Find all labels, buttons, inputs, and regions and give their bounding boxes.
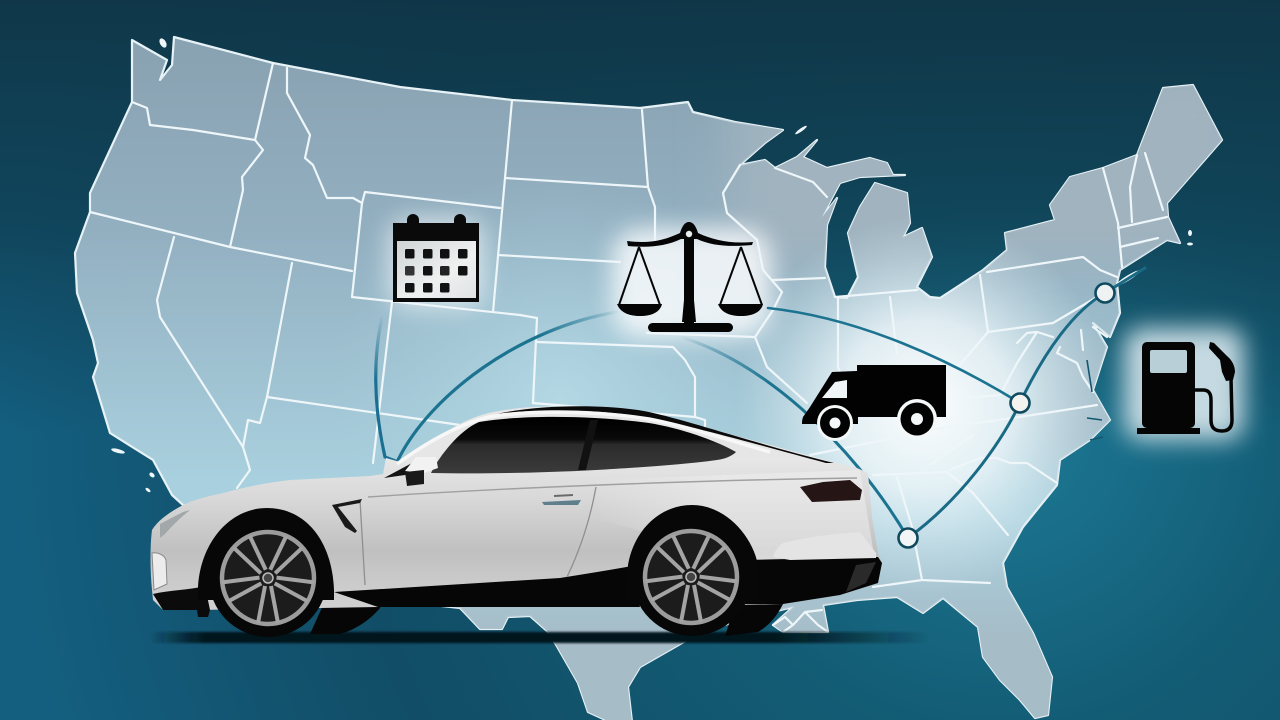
islands bbox=[111, 37, 1193, 493]
headlight bbox=[160, 510, 190, 538]
rear bumper crease bbox=[773, 532, 876, 560]
front bumper grille bbox=[152, 553, 167, 590]
light rear quarter bbox=[596, 470, 874, 560]
route stop: south bbox=[898, 528, 918, 548]
side vent bbox=[332, 499, 362, 533]
icon: fuel pump bbox=[1124, 328, 1244, 440]
route stop: northeast bbox=[1096, 284, 1114, 302]
route stop: east bbox=[1010, 394, 1030, 412]
route arcs bbox=[376, 268, 1145, 538]
icon: delivery truck bbox=[802, 365, 946, 441]
black sill and rear bumper bbox=[334, 566, 640, 607]
fuel pump glow bbox=[1124, 328, 1244, 440]
ground shadow bbox=[150, 632, 930, 643]
belt line bbox=[368, 478, 857, 497]
windshield sliver bbox=[384, 463, 412, 478]
windows bbox=[431, 417, 736, 473]
icon: scales of justice bbox=[617, 222, 763, 332]
tail light bbox=[800, 480, 862, 502]
far-side wheels bbox=[310, 590, 785, 636]
arc: scales to southern stop bbox=[680, 337, 908, 538]
arc: car to scales bbox=[398, 312, 617, 460]
coastal bays bbox=[1087, 360, 1103, 440]
state borders bbox=[90, 63, 1167, 632]
roof chrome strip bbox=[397, 412, 770, 464]
door pillar bbox=[578, 420, 598, 470]
side mirror bbox=[405, 457, 438, 473]
arc: scales to eastern stop bbox=[768, 308, 1020, 403]
arc: calendar to car bbox=[376, 313, 398, 462]
rear wheel bbox=[625, 505, 758, 636]
icon: calendar bbox=[393, 214, 479, 302]
roof black edge bbox=[497, 406, 834, 463]
door lines bbox=[360, 487, 596, 585]
map glows bbox=[374, 85, 1222, 720]
front wheel bbox=[198, 508, 334, 637]
arc: southern stop to northeast stop bbox=[908, 268, 1145, 538]
door handle bbox=[542, 500, 581, 505]
rear diffuser detail bbox=[846, 562, 876, 592]
car body bbox=[150, 407, 882, 610]
car bbox=[150, 406, 930, 643]
